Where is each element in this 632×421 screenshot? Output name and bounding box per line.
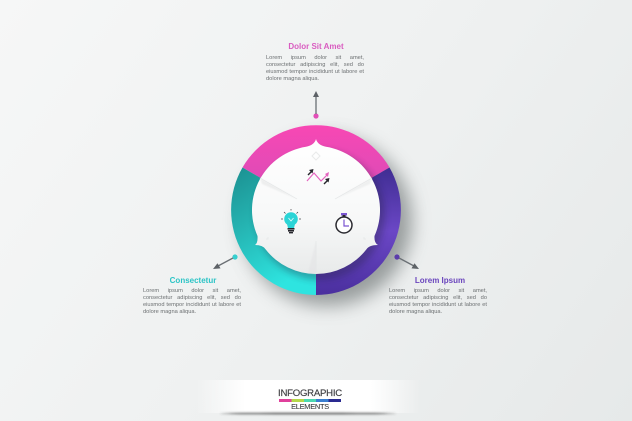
text block: left: eiusmod tempor incididunt ut labore et: [143, 302, 241, 308]
logo colour bar: [279, 399, 341, 402]
icon: trend arrows: [307, 169, 330, 184]
text block: left: Lorem ipsum dolor sit amet,: [143, 288, 241, 294]
inner fold lines: [260, 178, 372, 274]
text block: left: consectetur adipiscing elit, sed do: [143, 295, 241, 301]
ring segment: teal: [231, 168, 316, 295]
text block: right: dolore magna aliqua.: [389, 309, 442, 315]
banner shadow: [221, 411, 395, 416]
text block: left: dolore magna aliqua.: [143, 309, 196, 315]
icon: light bulb: [281, 209, 301, 233]
text block: right: eiusmod tempor incididunt ut labore et: [389, 302, 487, 308]
text block: right: Lorem ipsum dolor sit amet,: [389, 288, 487, 294]
logo text: ELEMENTS: ELEMENTS: [291, 402, 329, 410]
text block: left: [143, 288, 241, 315]
heading: Lorem Ipsum: Lorem Ipsum: [415, 276, 465, 285]
small fold notches: [266, 152, 366, 239]
footer banner with logo: [220, 380, 400, 416]
icon: stopwatch: [336, 213, 352, 233]
text block: top: eiusmod tempor incididunt ut labore et: [266, 69, 364, 75]
arrow: left: [213, 254, 238, 269]
heading: Dolor Sit Amet: Dolor Sit Amet: [288, 42, 344, 51]
inner fold shading: [260, 178, 372, 274]
circle drop shadow: [242, 136, 412, 306]
ring segment: pink: [242, 125, 390, 210]
arrow: top: [313, 91, 319, 119]
white inner shape: [252, 139, 380, 274]
text block: right: [389, 288, 487, 315]
text block: top: [266, 55, 364, 82]
white inner shape shadow: [255, 150, 385, 280]
text block: top: Lorem ipsum dolor sit amet,: [266, 55, 364, 61]
heading: Consectetur: Consectetur: [170, 276, 216, 285]
ring segment: purple: [316, 168, 401, 295]
banner panel: [196, 380, 420, 413]
text block: top: dolore magna aliqua.: [266, 76, 319, 82]
text block: top: consectetur adipiscing elit, sed do: [266, 62, 364, 68]
logo text: INFOGRAPHIC: INFOGRAPHIC: [278, 388, 342, 398]
text block: right: consectetur adipiscing elit, sed do: [389, 295, 487, 301]
arrow: right: [394, 254, 419, 269]
main graphic: circular diagram with arrows and icons: [213, 91, 423, 317]
